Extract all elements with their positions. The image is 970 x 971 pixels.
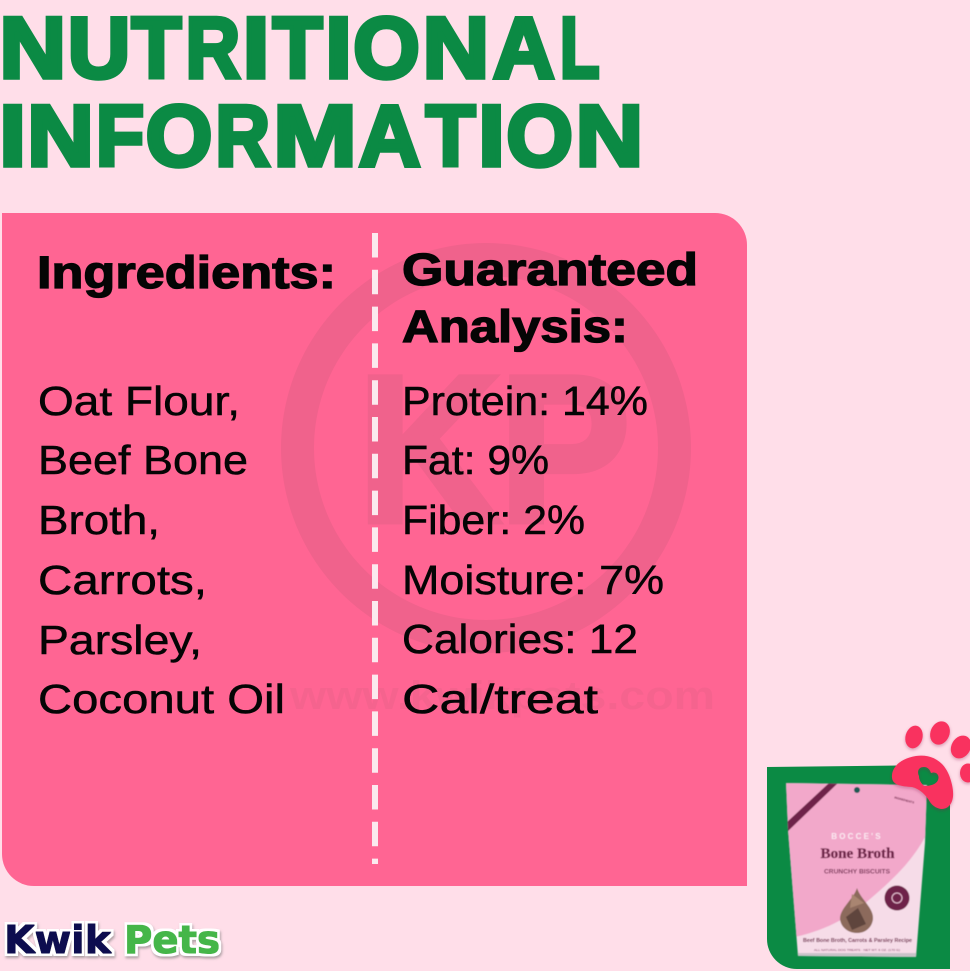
title: U (68, 0, 130, 97)
panel: nutrition card (2, 213, 747, 886)
title: T (273, 0, 322, 97)
logo: Kwik Pets (4, 918, 220, 962)
title: T (426, 88, 475, 185)
title: A (359, 88, 421, 185)
ingredients list: Carrots, (38, 557, 207, 603)
bag name: Bone Broth (820, 846, 894, 862)
title: L (560, 0, 600, 97)
title: O (146, 88, 212, 185)
title: N (0, 0, 66, 97)
analysis list: Calories: 12 (402, 616, 638, 662)
title: I (243, 0, 269, 97)
ingredients list: Oat Flour, (38, 378, 240, 424)
icon: paw (892, 718, 970, 809)
bag subtitle: CRUNCHY BISCUITS (824, 870, 890, 876)
ingredients list: Parsley, (38, 617, 202, 663)
analysis list (402, 378, 664, 722)
analysis heading: Analysis: (402, 301, 628, 352)
watermark: KP logo (281, 243, 715, 718)
title: R (185, 0, 240, 97)
ingredients heading: Ingredients: (37, 247, 336, 298)
title: T (132, 0, 181, 97)
title: I (478, 88, 505, 185)
title: N (576, 88, 643, 185)
bag recipe line: Beef Bone Broth, Carrots & Parsley Recipe (803, 938, 912, 944)
title: A (493, 0, 555, 97)
product: treat bag (780, 778, 930, 963)
title: M (273, 88, 357, 185)
title: N (423, 0, 489, 97)
ingredients list: Coconut Oil (38, 676, 285, 722)
analysis list: Protein: 14% (402, 378, 648, 424)
ingredients list: Broth, (38, 497, 160, 543)
product frame: green square (767, 765, 950, 969)
title (0, 0, 643, 185)
analysis heading (402, 244, 698, 352)
guaranteed analysis column (402, 244, 698, 722)
title: O (353, 0, 420, 97)
title: O (506, 88, 573, 185)
bag brand: BOCCE'S (831, 832, 883, 841)
bag stamp: INGREDIENTS (894, 795, 915, 805)
watermark: KP logo: KP (358, 334, 630, 566)
ingredients column (37, 247, 336, 722)
logo: Kwik Pets: Pets (124, 918, 220, 962)
analysis heading: Guaranteed (402, 244, 698, 295)
analysis list: Cal/treat (402, 676, 599, 722)
divider: dashed line (372, 233, 378, 864)
ingredients list: Beef Bone (38, 437, 248, 483)
bag fine print: ALL NATURAL DOG TREATS · NET WT. 6 OZ. (170 G) (814, 948, 900, 952)
analysis list: Moisture: 7% (402, 557, 664, 603)
bag hole (854, 787, 860, 793)
logo: Kwik Pets: Kwik (4, 918, 112, 962)
bag biscuit window (840, 888, 873, 933)
analysis list: Fat: 9% (402, 437, 549, 483)
watermark: KP logo: www.kwikpets.com (289, 674, 715, 718)
title: I (325, 0, 352, 97)
analysis list: Fiber: 2% (402, 497, 585, 543)
bag badge (884, 886, 910, 910)
title: F (96, 88, 144, 185)
title: N (27, 88, 94, 185)
title: R (215, 88, 270, 185)
ingredients list (38, 378, 285, 722)
